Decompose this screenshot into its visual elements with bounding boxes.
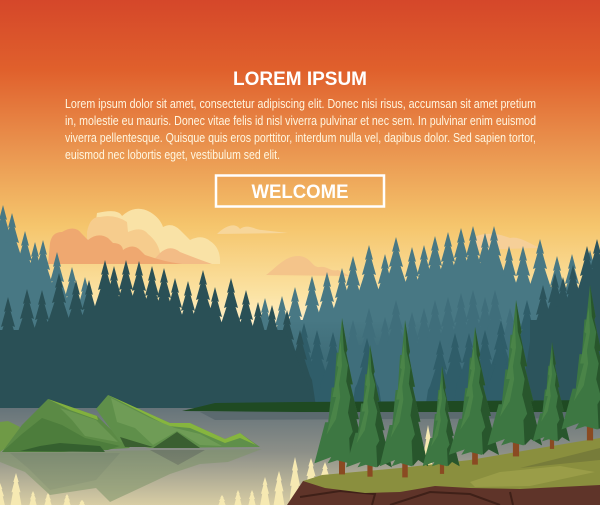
dark forest right — [519, 239, 600, 415]
grass shading — [470, 466, 595, 487]
green island — [0, 395, 260, 452]
dark far shore strip — [182, 400, 600, 420]
hill: second peak — [96, 395, 260, 448]
title: LOREM IPSUM — [233, 69, 367, 90]
hill: first peak — [2, 399, 130, 452]
cloud: behind right forest — [470, 234, 540, 250]
body text — [65, 97, 536, 162]
cloud: small upper cloud — [217, 225, 288, 234]
cliff cracks — [300, 491, 513, 505]
body text: euismod nec lobortis eget, vestibulum sed elit. — [65, 148, 280, 162]
pine tree 4 — [423, 366, 460, 474]
pine tree 7 — [533, 342, 570, 449]
pine tree 5 — [449, 327, 499, 465]
pine tree 3 — [380, 320, 428, 477]
dark forest left — [0, 260, 324, 460]
pine tree 1 — [314, 318, 367, 474]
cliff rock — [287, 462, 600, 505]
welcome button — [216, 176, 384, 206]
mid forest layer — [329, 290, 534, 450]
pine tree 8 — [561, 285, 600, 440]
hill: small left — [0, 421, 20, 452]
pine tree row — [314, 285, 600, 477]
pine tree 2 — [346, 345, 392, 477]
rocky shore — [287, 438, 600, 505]
lake water — [0, 408, 600, 505]
cloud: large left cloud — [48, 209, 220, 264]
cloud: middle low cloud — [266, 256, 350, 276]
back forest layer — [0, 205, 600, 428]
island reflection — [0, 449, 262, 502]
pine tree 6 — [487, 300, 542, 456]
front blue forest layer — [280, 300, 551, 470]
back forest depth shading — [290, 320, 600, 410]
welcome button: WELCOME — [252, 182, 348, 203]
grass slope — [303, 438, 600, 493]
pale tree reflections — [0, 425, 433, 505]
